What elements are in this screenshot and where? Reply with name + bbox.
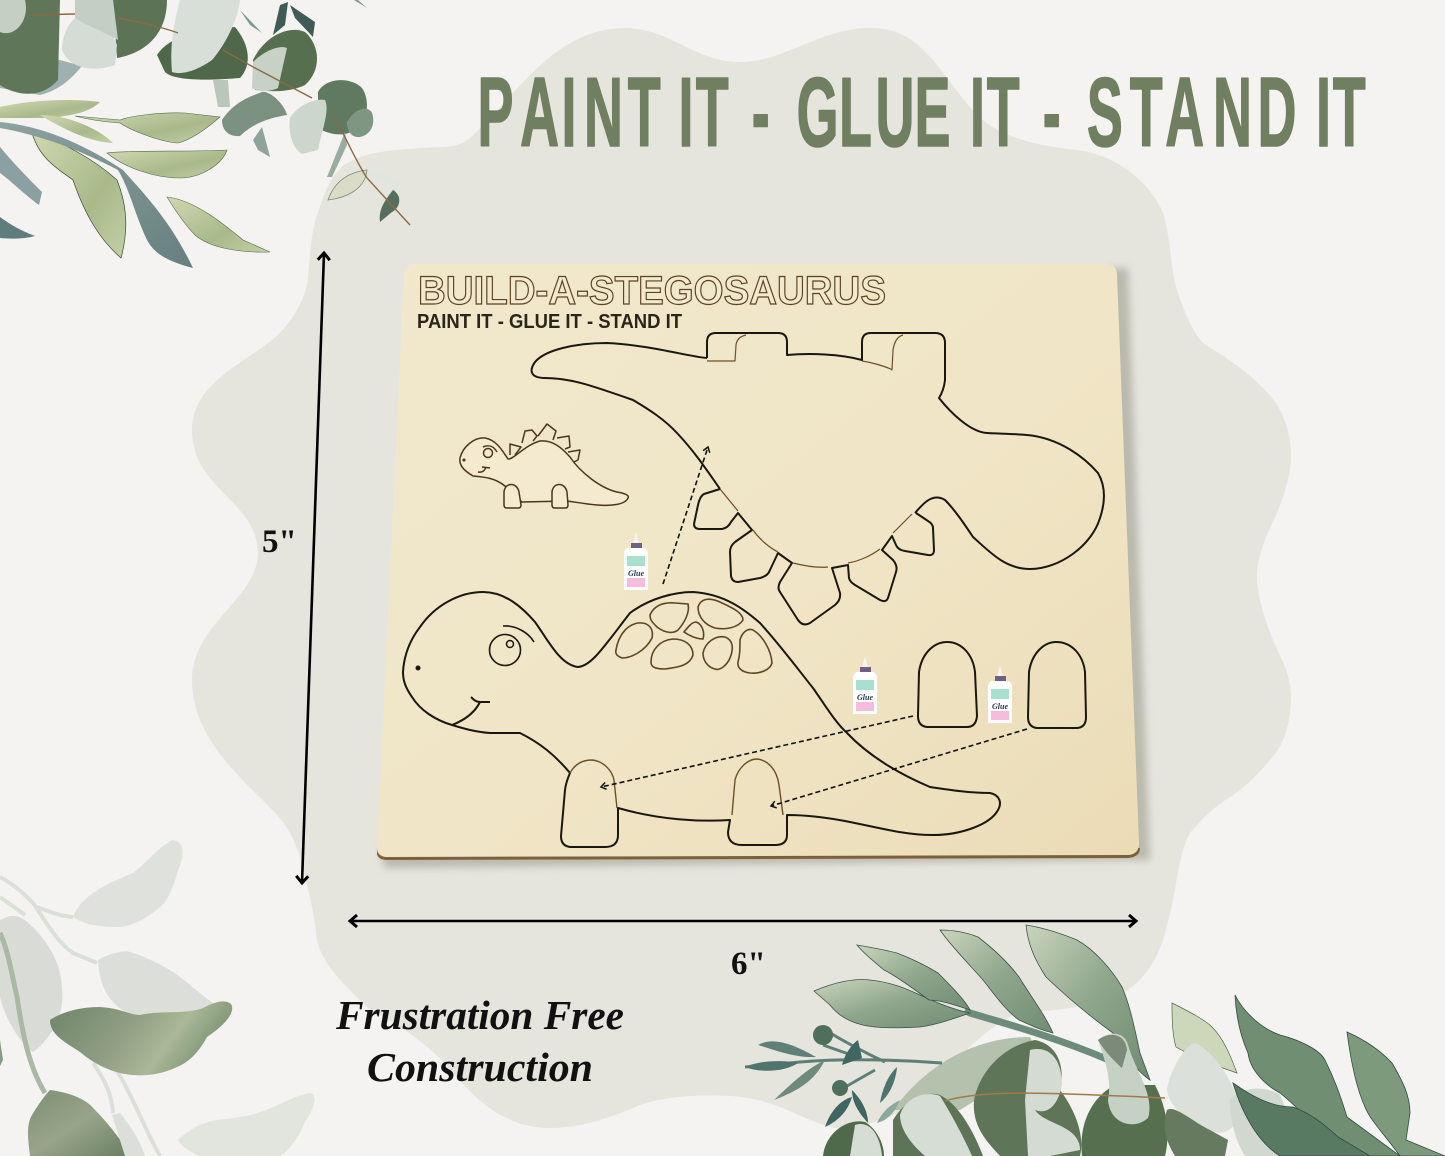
label: 6 inches: 6" — [731, 946, 766, 982]
foliage: top left — [0, 0, 410, 268]
background scalloped blob — [192, 28, 1291, 1128]
main dinosaur body piece — [403, 592, 1000, 847]
height arrow — [302, 253, 324, 883]
board heading: BUILD-A-STEGOSAURUS — [418, 269, 886, 313]
small stegosaurus logo — [460, 424, 628, 508]
caption line 2: Construction — [367, 1044, 593, 1090]
glue bottle 2: Glue — [857, 693, 873, 702]
width arrow — [350, 920, 1136, 922]
glue bottle 1 — [624, 533, 648, 590]
foliage: bottom right — [745, 925, 1445, 1156]
foliage: bottom left — [0, 840, 315, 1156]
body plates — [616, 599, 772, 673]
glue bottle 3: Glue — [992, 702, 1008, 711]
wood board — [377, 264, 1150, 868]
stegosaurus plates piece — [532, 333, 1104, 624]
board face — [377, 264, 1139, 857]
dashed arrows — [601, 447, 1027, 806]
glue bottle 1: Glue — [628, 569, 644, 578]
caption line 1: Frustration Free — [335, 992, 624, 1038]
leg pieces — [918, 642, 1086, 728]
label: 5 inches: 5" — [262, 524, 297, 560]
board subheading: PAINT IT - GLUE IT - STAND IT — [417, 311, 682, 333]
title: PAINT IT - GLUE IT - STAND IT — [478, 57, 1366, 167]
board edge — [377, 848, 1140, 860]
glue bottle 2 — [853, 657, 877, 714]
glue bottle 3 — [988, 666, 1012, 723]
glue bottle icons — [624, 533, 1012, 723]
board shadow — [380, 268, 1150, 868]
caption — [335, 992, 624, 1090]
